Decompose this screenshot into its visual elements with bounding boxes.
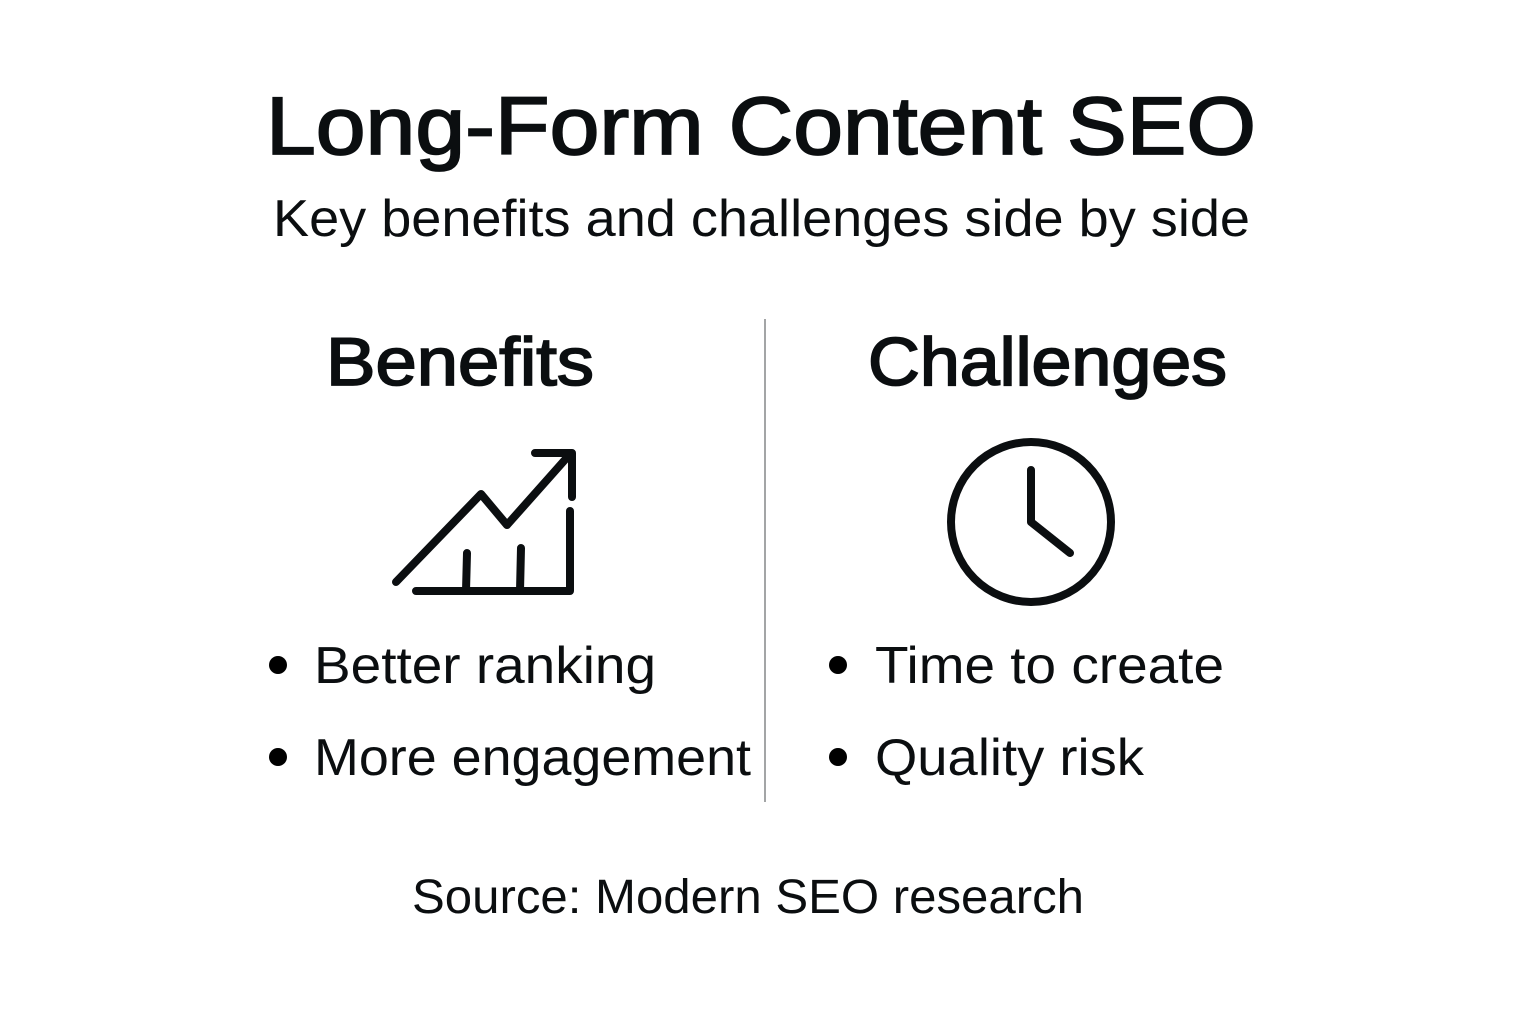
bullet item: quality risk: Quality risk [875,729,1145,787]
icon: clock [951,442,1111,602]
heading: benefits: Benefits [326,324,594,400]
list: challenges [829,637,1224,787]
bullet item: more engagement: More engagement [314,729,752,787]
heading: challenges: Challenges [868,324,1227,400]
list: benefits [269,637,752,787]
bullet item: better ranking: Better ranking [314,637,656,695]
panel: challenges [829,324,1227,787]
source note: Source: Modern SEO research [412,871,1084,924]
title: Long-Form Content SEO [266,81,1256,172]
subtitle: Key benefits and challenges side by side [273,190,1250,248]
panel: benefits [269,324,752,787]
icon: rising chart with arrow [396,453,572,591]
bullet item: time to create: Time to create [875,637,1224,695]
